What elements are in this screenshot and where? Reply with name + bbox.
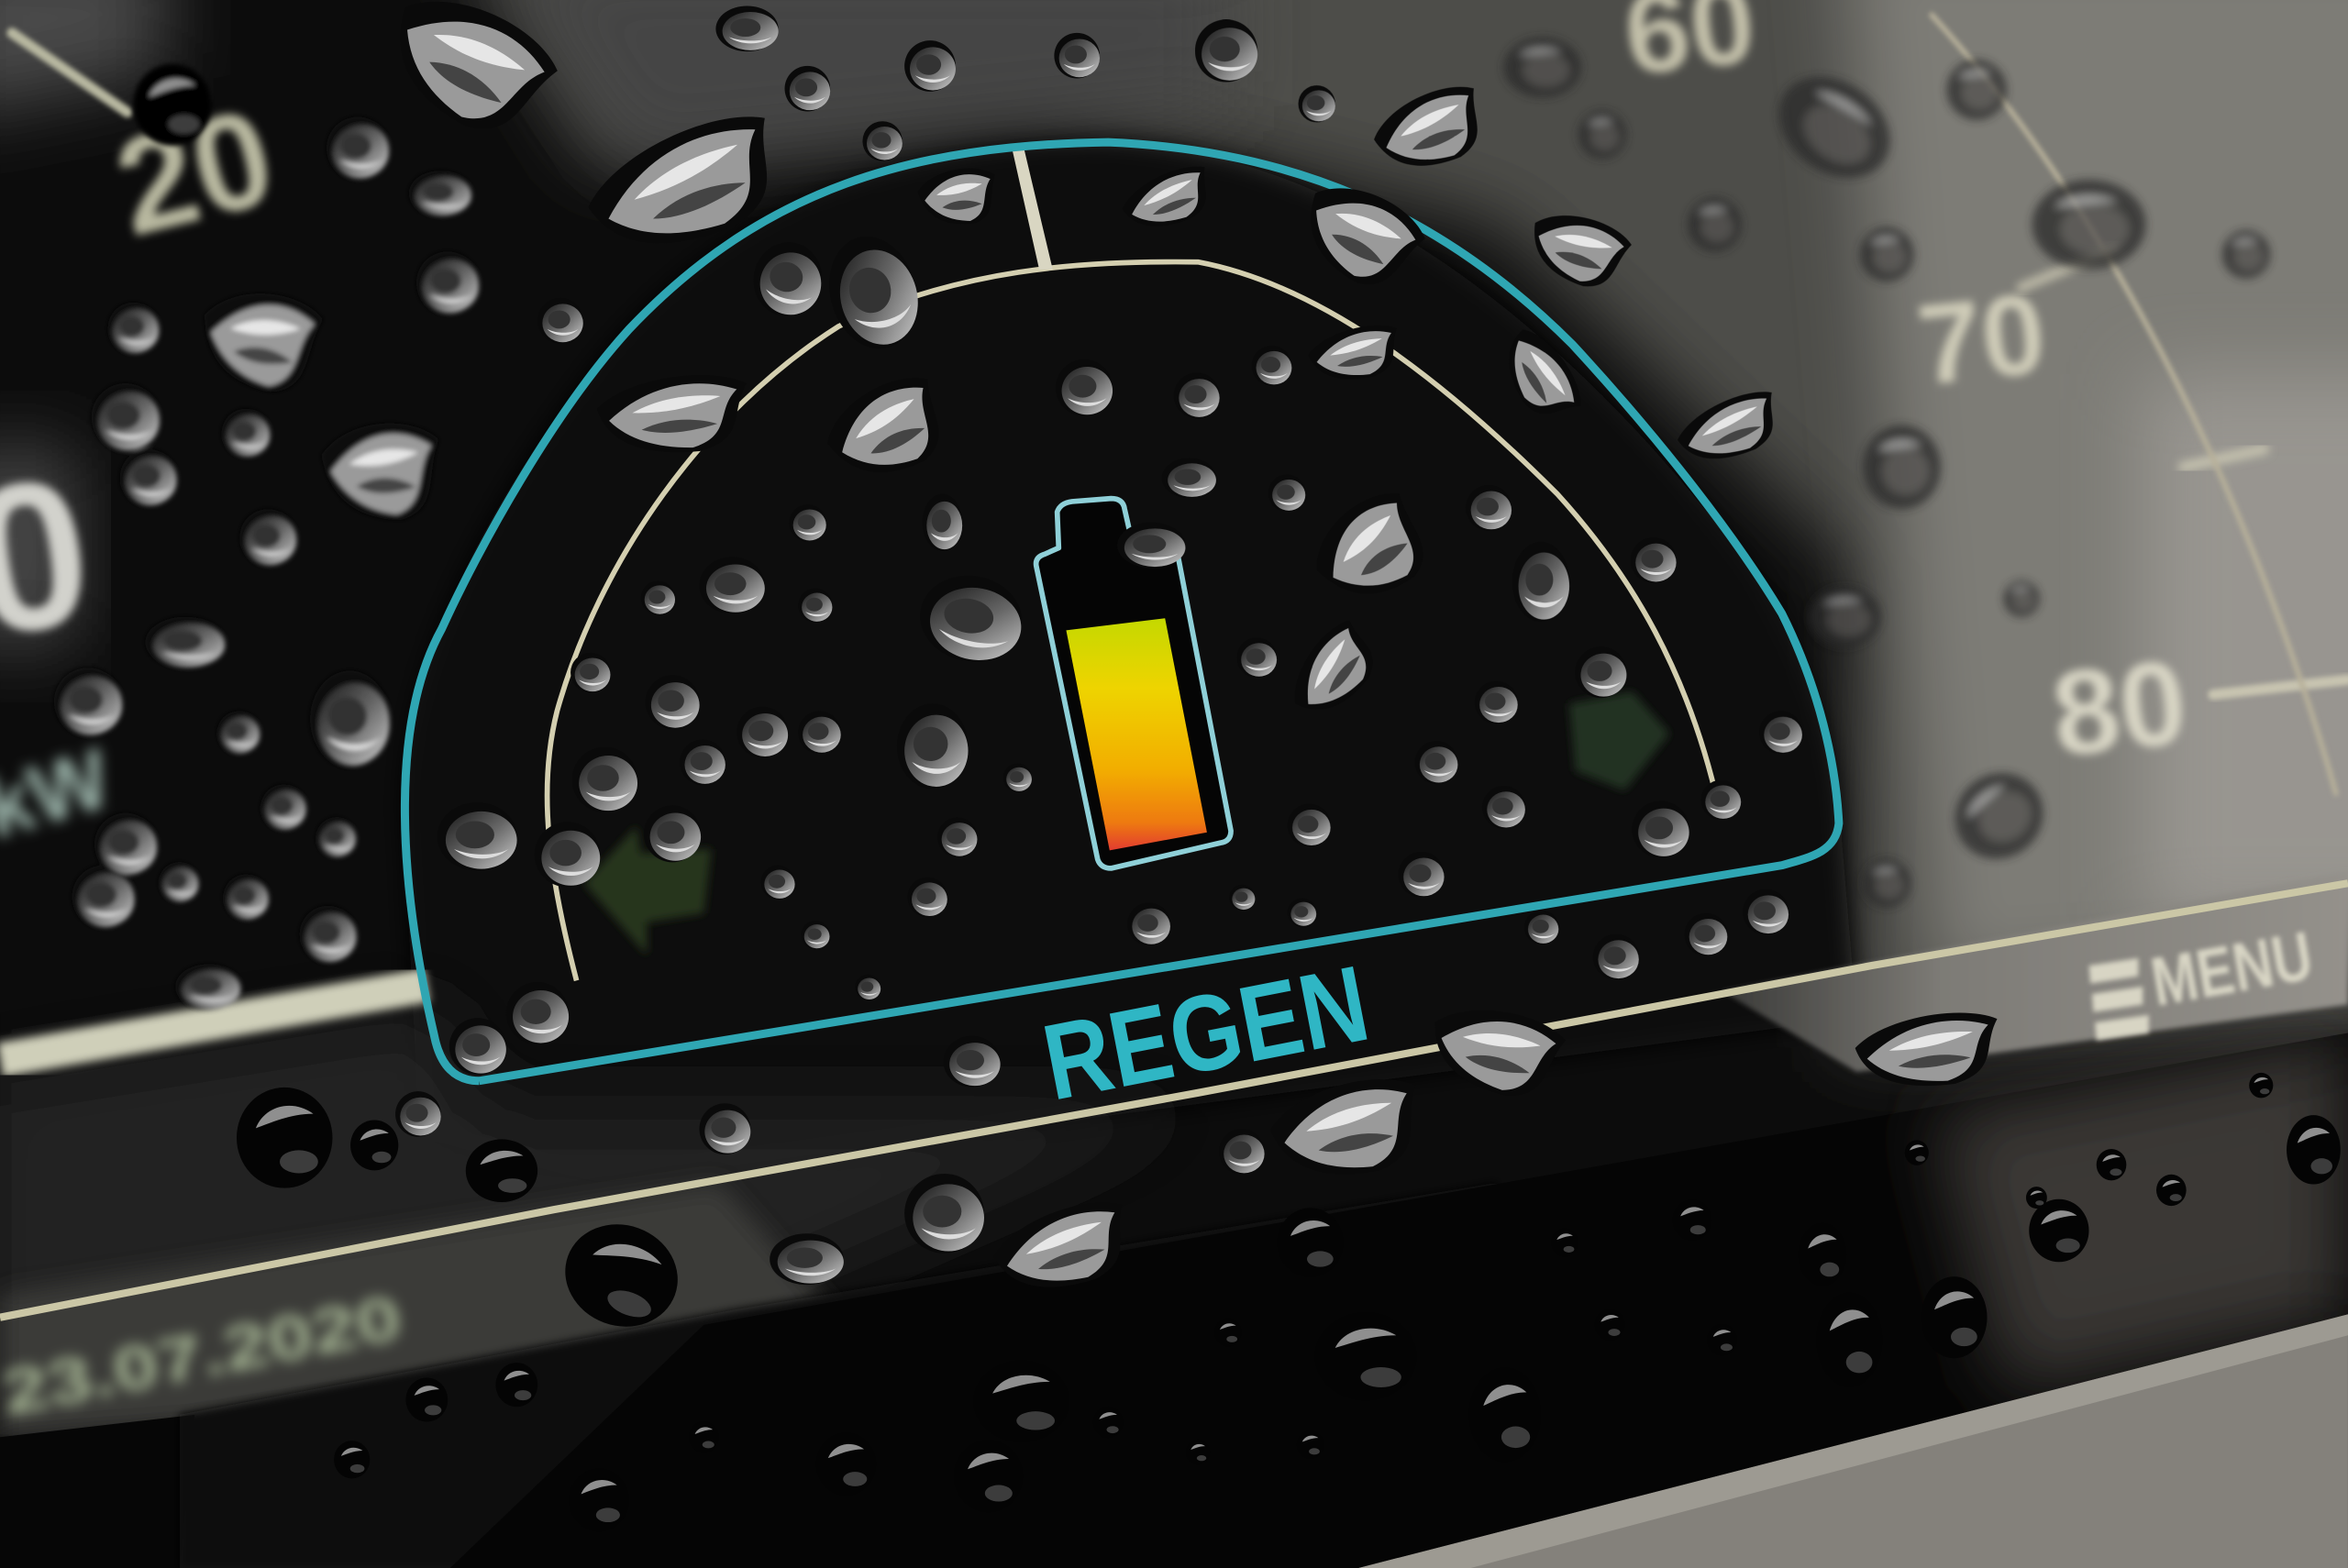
icon: menu bars	[2089, 958, 2149, 1041]
speed number: 20: 20	[102, 79, 288, 265]
icon: battery	[1036, 499, 1231, 868]
gauge: tick mark	[1013, 149, 1053, 270]
panel: MENU strip	[1722, 871, 2348, 1072]
label: REGEN: REGEN	[1035, 943, 1378, 1123]
blurred date label bottom left: 23.07.2020	[0, 1282, 407, 1429]
panel: black display face	[403, 142, 1856, 1183]
scale: blurred tick lines	[0, 15, 2348, 1060]
battery charge fill	[1066, 618, 1207, 850]
gauge: dim left arrow	[584, 826, 712, 955]
label: MENU	[2089, 917, 2318, 1041]
speed number: 80: 80	[2046, 635, 2193, 781]
droplets: out of focus on left	[54, 64, 479, 1010]
droplets: out of focus on right	[1503, 38, 2270, 907]
gauge: inner cream arc	[548, 262, 1719, 980]
panel: lower dashboard housing	[0, 1003, 2348, 1568]
long cream horizon line	[0, 883, 2348, 1318]
battery outline	[1036, 499, 1231, 868]
gauge: outer teal outline	[404, 142, 1839, 1081]
gauge: dim right arrow	[1569, 691, 1669, 790]
speed number: 70: 70	[1912, 271, 2051, 409]
panel: concrete ledge bottom right	[1356, 1314, 2348, 1568]
